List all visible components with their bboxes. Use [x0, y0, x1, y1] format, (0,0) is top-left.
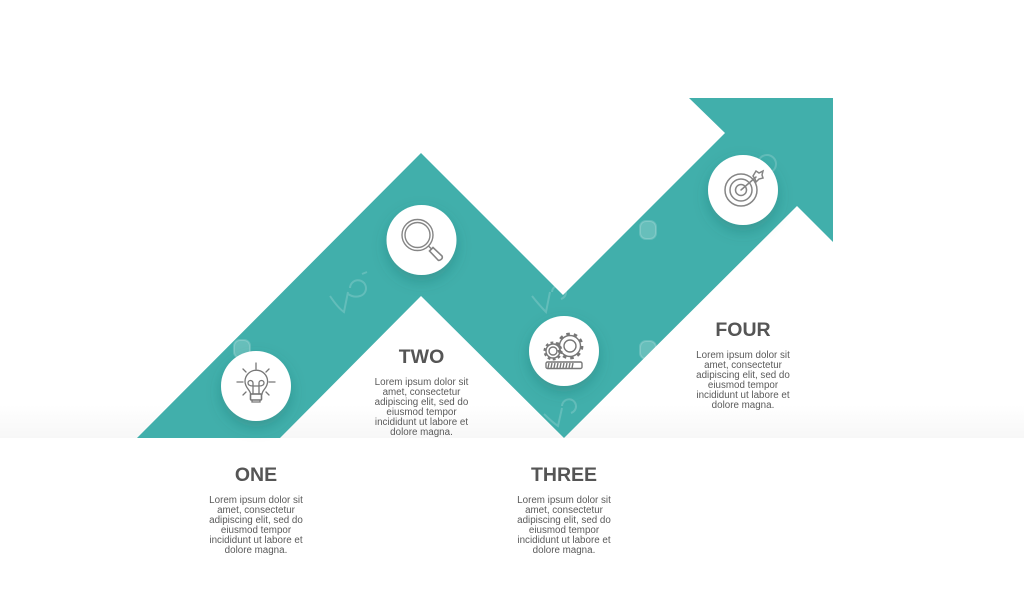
- step one text: amet, consectetur: [217, 505, 295, 516]
- step two heading: TWO: [399, 346, 444, 368]
- step three node: [529, 316, 599, 386]
- step three text: [517, 495, 611, 556]
- step one text: adipiscing elit, sed do: [209, 515, 303, 526]
- step one text: dolore magna.: [225, 545, 287, 556]
- step one text: eiusmod tempor: [221, 525, 291, 536]
- step one text: Lorem ipsum dolor sit: [209, 495, 303, 506]
- step four text: Lorem ipsum dolor sit: [696, 350, 790, 361]
- step three text: incididunt ut labore et: [517, 535, 611, 546]
- icon: magnifying glass: [402, 220, 442, 260]
- step one text: incididunt ut labore et: [209, 535, 303, 546]
- step two text: Lorem ipsum dolor sit: [375, 377, 468, 388]
- step two text: incididunt ut labore et: [375, 417, 468, 428]
- icon: light bulb: [237, 363, 275, 402]
- step three text: amet, consectetur: [525, 505, 603, 516]
- watermarks: [234, 155, 776, 426]
- step one heading: ONE: [235, 464, 277, 486]
- step two text: eiusmod tempor: [386, 407, 457, 418]
- zigzag arrow: [137, 98, 833, 438]
- step three heading: THREE: [531, 464, 597, 486]
- step two node: [386, 205, 456, 275]
- step four text: dolore magna.: [712, 400, 774, 411]
- step four text: amet, consectetur: [704, 360, 782, 371]
- step four heading: FOUR: [715, 319, 771, 341]
- step three text: dolore magna.: [533, 545, 595, 556]
- step two text: amet, consectetur: [383, 387, 460, 398]
- step four text: [696, 350, 790, 411]
- icon: target with arrow: [725, 171, 763, 206]
- step four text: eiusmod tempor: [708, 380, 778, 391]
- step two text: [375, 377, 468, 438]
- step four text: incididunt ut labore et: [696, 390, 790, 401]
- step two text: adipiscing elit, sed do: [375, 397, 468, 408]
- step four text: adipiscing elit, sed do: [696, 370, 790, 381]
- step one text: [209, 495, 303, 556]
- step three text: adipiscing elit, sed do: [517, 515, 611, 526]
- icon: gears with progress bar: [545, 334, 582, 368]
- step two text: dolore magna.: [390, 427, 453, 438]
- step three text: Lorem ipsum dolor sit: [517, 495, 611, 506]
- step one node: [221, 351, 291, 421]
- step four node: [708, 155, 778, 225]
- step three text: eiusmod tempor: [529, 525, 599, 536]
